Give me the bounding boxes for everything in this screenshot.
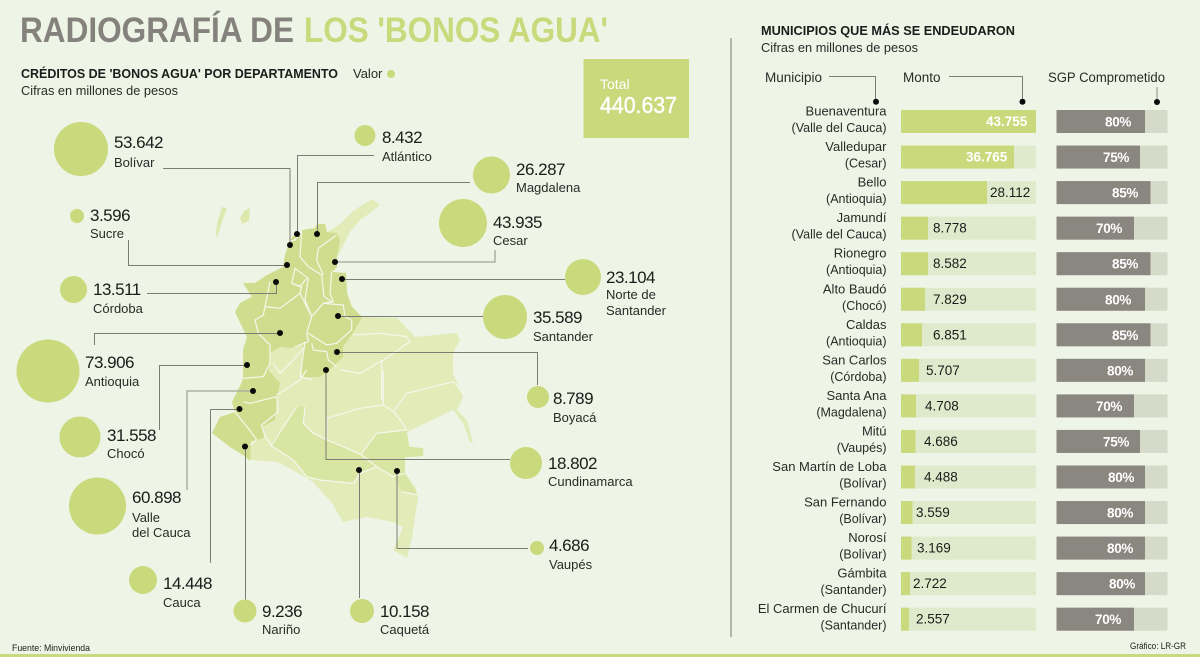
row: Caldas: 6.851 [933, 327, 967, 342]
column header: SGP Comprometido [1048, 70, 1165, 105]
department: Cauca: 14.448 [163, 574, 212, 593]
row: San Carlos [822, 352, 1168, 384]
row: Gámbita: 2.722 [913, 576, 947, 591]
dark departments, Valle, Cauca and Nariño [212, 370, 280, 461]
department: Córdoba [60, 276, 144, 316]
department: Cesar: 43.935 [493, 213, 542, 232]
graphic credit: Gráfico: LR-GR [1130, 641, 1186, 651]
row: Rionegro: (Antioquia) [826, 263, 886, 277]
department: Valle del Cauca: Valle [132, 510, 160, 525]
department: Sucre: Sucre [90, 226, 124, 241]
total box: Total [600, 76, 630, 92]
department: Atlántico: 8.432 [382, 128, 422, 147]
row: Gámbita: Gámbita [837, 566, 887, 581]
department: Chocó: Chocó [107, 446, 145, 461]
row: Rionegro: 8.582 [933, 256, 967, 271]
row: Valledupar: (Cesar) [845, 157, 886, 171]
department: Sucre [70, 206, 130, 241]
row: Rionegro: Rionegro [834, 246, 886, 261]
row: Buenaventura: Buenaventura [806, 104, 887, 118]
map location dots [236, 231, 400, 474]
department: Magdalena: 26.287 [516, 160, 565, 179]
row: Jamundí [792, 210, 1168, 242]
row: Norosí: 80% [1107, 541, 1133, 556]
row: San Fernando: San Fernando [804, 495, 886, 510]
row: El Carmen de Chucurí: El Carmen de Chucurí [758, 601, 887, 616]
department: Cauca: Cauca [163, 595, 201, 610]
row: Santa Ana [816, 388, 1168, 419]
column header: Municipio [765, 70, 879, 105]
row: Caldas [826, 317, 1168, 348]
leader lines [94, 156, 565, 600]
row: Buenaventura: (Valle del Cauca) [792, 121, 886, 135]
department: Valle del Cauca [69, 478, 191, 540]
row: El Carmen de Chucurí: 70% [1095, 612, 1121, 627]
department: Bolívar [54, 122, 163, 176]
row: San Martín de Loba: San Martín de Loba [772, 459, 887, 474]
column header: Monto: Monto [903, 70, 941, 85]
row: Santa Ana: Santa Ana [826, 388, 887, 403]
column header: Monto [903, 70, 1026, 105]
department: Bolívar: 53.642 [114, 133, 163, 152]
department: Boyacá: 8.789 [553, 389, 593, 408]
department: Atlántico [354, 125, 432, 164]
department: Boyacá [527, 386, 597, 425]
title: LOS 'BONOS AGUA' [304, 11, 608, 50]
row: Jamundí: (Valle del Cauca) [792, 228, 886, 242]
row: Caldas: (Antioquia) [826, 334, 886, 348]
department: Córdoba: 13.511 [93, 280, 141, 299]
row: Norosí: (Bolívar) [839, 548, 886, 562]
department: Antioquia [16, 340, 140, 402]
row: San Martín de Loba: 80% [1108, 470, 1134, 485]
department: Cundinamarca: 18.802 [548, 454, 597, 473]
row: San Carlos: (Córdoba) [830, 370, 886, 384]
row: El Carmen de Chucurí: 2.557 [916, 612, 950, 627]
department: Norte de Santander: Santander [606, 303, 667, 318]
row: Buenaventura: 43.755 [986, 114, 1028, 129]
row: Gámbita: (Santander) [820, 583, 886, 597]
row: San Martín de Loba [772, 459, 1168, 490]
row: Bello: 85% [1112, 186, 1138, 201]
row: San Fernando: 80% [1107, 506, 1133, 521]
row: Caldas: 85% [1112, 328, 1138, 343]
department: Nariño: Nariño [262, 622, 300, 637]
row: San Fernando: (Bolívar) [839, 512, 886, 526]
right panel heading: Cifras en millones de pesos [761, 40, 918, 55]
mid-tone departments: Caquetá and Vaupés [270, 407, 423, 495]
department: Chocó [60, 416, 156, 461]
department: Boyacá: Boyacá [553, 410, 597, 425]
dark departments, north and west [235, 224, 362, 378]
department: Magdalena [473, 156, 581, 195]
row: Bello: (Antioquia) [826, 192, 886, 206]
department: Caquetá: 10.158 [380, 602, 429, 621]
department: Valle del Cauca: del Cauca [132, 525, 191, 540]
department: Santander: Santander [533, 329, 594, 344]
source note: Fuente: Minvivienda [12, 643, 91, 654]
row: Jamundí: 8.778 [933, 221, 967, 236]
row: Norosí: 3.169 [917, 541, 951, 556]
department: Nariño [234, 600, 302, 637]
title: RADIOGRAFÍA DE [20, 10, 294, 50]
department: Vaupés: Vaupés [549, 557, 593, 572]
department borders, north [243, 231, 410, 400]
department: Valle del Cauca: 60.898 [132, 488, 181, 507]
island: San Andrés and Providencia [216, 207, 250, 238]
department: Santander [483, 295, 594, 344]
row: Norosí: Norosí [848, 530, 887, 545]
title [20, 10, 608, 50]
column header: SGP Comprometido: SGP Comprometido [1048, 70, 1165, 85]
department: Vaupés: 4.686 [549, 536, 589, 555]
row: Valledupar [825, 139, 1168, 171]
row: Caldas: Caldas [846, 317, 887, 332]
row: Bello [826, 175, 1168, 206]
department: Cundinamarca: Cundinamarca [548, 474, 633, 489]
department: Norte de Santander [565, 259, 667, 318]
row: San Carlos: San Carlos [822, 352, 887, 367]
department: Antioquia: Antioquia [85, 374, 140, 389]
row: Mitú [837, 423, 1168, 455]
map of Colombia [212, 199, 473, 558]
department: Nariño: 9.236 [262, 602, 302, 621]
left panel heading [21, 66, 338, 98]
department borders, south [233, 370, 463, 495]
row: El Carmen de Chucurí: (Santander) [820, 619, 886, 633]
row: Valledupar: Valledupar [825, 139, 887, 154]
column header: Municipio: Municipio [765, 70, 822, 85]
row: San Fernando: 3.559 [916, 505, 950, 520]
department: Chocó: 31.558 [107, 426, 156, 445]
row: San Martín de Loba: (Bolívar) [839, 476, 886, 490]
row: Buenaventura: 80% [1105, 114, 1131, 130]
row: Rionegro: 85% [1112, 257, 1138, 272]
left panel heading: Cifras en millones de pesos [21, 83, 178, 98]
row: Alto Baudó: (Chocó) [842, 299, 886, 313]
row: Alto Baudó: 7.829 [933, 292, 967, 307]
right panel heading [761, 23, 1015, 55]
department: Cesar [439, 199, 542, 248]
row: San Martín de Loba: 4.488 [924, 470, 958, 484]
department: Cundinamarca [510, 447, 633, 489]
department: Norte de Santander: Norte de [606, 287, 656, 302]
row: Norosí [839, 530, 1168, 562]
left panel heading: CRÉDITOS DE 'BONOS AGUA' POR DEPARTAMENTO [21, 66, 338, 81]
row: Buenaventura [792, 104, 1168, 135]
row: Mitú: 4.686 [924, 434, 958, 449]
department: Sucre: 3.596 [90, 206, 130, 225]
row: Jamundí: 70% [1096, 221, 1122, 236]
department: Norte de Santander: 23.104 [606, 268, 655, 287]
row: Alto Baudó [823, 281, 1168, 313]
row: Santa Ana: 70% [1096, 399, 1122, 414]
department: Caquetá: Caquetá [380, 622, 430, 637]
row: Valledupar: 36.765 [966, 150, 1008, 165]
row: Gámbita: 80% [1109, 577, 1135, 592]
row: Mitú: (Vaupés) [837, 441, 886, 455]
department: Cesar: Cesar [493, 233, 528, 248]
row: Santa Ana: (Magdalena) [816, 405, 886, 419]
row: Mitú: 75% [1103, 434, 1129, 449]
row: Rionegro [826, 246, 1168, 277]
department: Antioquia: 73.906 [85, 353, 134, 372]
department: Vaupés [530, 536, 593, 572]
row: Bello: Bello [858, 175, 886, 190]
department: Magdalena: Magdalena [516, 180, 581, 195]
row: San Fernando [804, 495, 1168, 526]
row: Valledupar: 75% [1103, 150, 1129, 165]
right panel heading: MUNICIPIOS QUE MÁS SE ENDEUDARON [761, 23, 1015, 38]
department: Bolívar: Bolívar [114, 155, 155, 170]
department: Atlántico: Atlántico [382, 149, 432, 164]
department: Cauca [129, 566, 212, 610]
legend: valor [353, 66, 395, 81]
row: Santa Ana: 4.708 [925, 398, 959, 413]
row: Jamundí: Jamundí [837, 210, 887, 225]
department: Córdoba: Córdoba [93, 301, 144, 316]
row: Alto Baudó: 80% [1105, 292, 1131, 307]
row: San Carlos: 80% [1107, 363, 1133, 378]
total box [584, 59, 689, 138]
department: Santander: 35.589 [533, 308, 582, 327]
row: Gámbita [820, 566, 1168, 597]
row: Bello: 28.112 [990, 185, 1030, 200]
row: Mitú: Mitú [862, 423, 886, 438]
row: El Carmen de Chucurí [758, 601, 1168, 633]
total box: 440.637 [600, 92, 677, 118]
country base, light departments [212, 199, 473, 558]
row: San Carlos: 5.707 [926, 363, 960, 378]
department: Caquetá [350, 599, 430, 637]
legend: valor: Valor [353, 66, 383, 81]
row: Alto Baudó: Alto Baudó [823, 281, 886, 296]
